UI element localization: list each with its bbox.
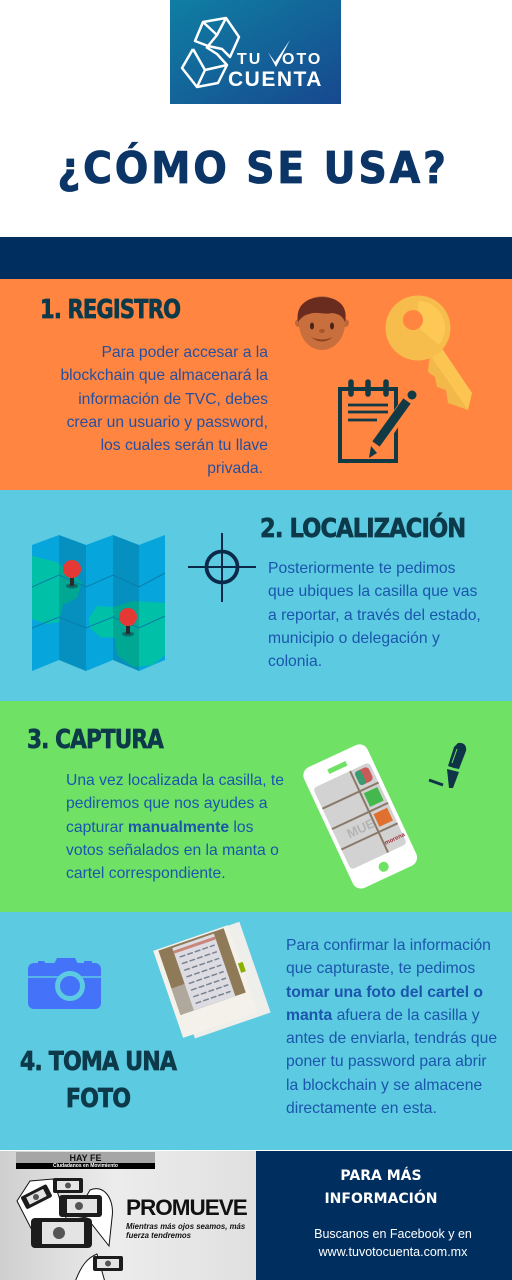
text: slogan: Mientras más ojos seamos, más fuerza tendremos: [126, 1222, 245, 1240]
text: toma una foto: directamente en esta.: [286, 1100, 437, 1117]
heading: para más información: PARA MÁS: [340, 1168, 422, 1184]
text: localización: [268, 560, 481, 670]
text: captura: capturar manualmente los: [66, 819, 253, 836]
panel: registro: [0, 279, 512, 490]
text: registro: los cuales serán tu llave: [101, 437, 268, 454]
text: toma una foto: que capturaste, te pedimos: [286, 960, 475, 977]
banner: hay fe: [16, 1152, 155, 1169]
text: contacto: www.tuvotocuenta.com.mx: [319, 1245, 467, 1259]
icon: phone: morena: [384, 832, 407, 847]
icon: photo: [153, 922, 271, 1038]
icon: map: [32, 535, 166, 671]
text: registro: crear un usuario y password,: [67, 414, 268, 431]
heading: localización: 2. LOCALIZACIÓN: [260, 514, 465, 544]
text: promueve: PROMUEVE: [126, 1195, 247, 1220]
icon: face: [295, 296, 349, 350]
text: registro: información de TVC, debes: [78, 391, 268, 408]
title: ¿CÓMO SE USA?: [57, 143, 449, 194]
icon: phone: [303, 744, 418, 888]
text: toma una foto: [286, 937, 497, 1117]
heading: registro: 1. REGISTRO: [40, 295, 180, 325]
text: localización: que ubiques la casilla que vas: [268, 583, 477, 600]
icon: phone: MUE: [344, 815, 377, 841]
logo: [170, 0, 341, 104]
text: localización: municipio o delegación y: [268, 630, 440, 647]
text: captura: Una vez localizada la casilla, te: [66, 772, 284, 789]
text: captura: cartel correspondiente.: [66, 865, 226, 882]
text: registro: Para poder accesar a la: [101, 344, 268, 361]
logo: OTO: [282, 51, 322, 68]
banner: hay fe: HAY FE: [69, 1153, 102, 1163]
text: localización: a reportar, a través del estado,: [268, 607, 481, 624]
text: toma una foto: tomar una foto del cartel o: [286, 984, 483, 1001]
text: localización: colonia.: [268, 653, 322, 670]
text: toma una foto: manta afuera de la casilla y: [286, 1007, 480, 1024]
illustration: hands with phones: [16, 1178, 123, 1280]
text: captura: pediremos que nos ayudes a: [66, 795, 267, 812]
heading: toma una foto: FOTO: [66, 1084, 130, 1114]
icon: key: [386, 296, 472, 410]
panel: más información: [256, 1151, 512, 1280]
panel: captura: [0, 701, 512, 912]
logo: TU: [237, 51, 262, 68]
heading: toma una foto: 4. TOMA UNA: [20, 1047, 176, 1077]
text: toma una foto: Para confirmar la información: [286, 937, 491, 954]
heading: para más información: INFORMACIÓN: [324, 1191, 438, 1207]
text: registro: privada.: [207, 460, 263, 477]
text: localización: Posteriormente te pedimos: [268, 560, 455, 577]
text: captura: [66, 772, 284, 882]
icon: pen: [428, 742, 466, 788]
navy band: [0, 237, 512, 279]
text: registro: [60, 344, 268, 477]
text: toma una foto: antes de enviarla, tendrás que: [286, 1030, 497, 1047]
heading: para más información: [324, 1166, 438, 1207]
heading: toma una foto: [20, 1047, 178, 1114]
text: contacto: Buscanos en Facebook y en: [314, 1227, 472, 1241]
panel: promueve: [0, 1151, 256, 1280]
icon: camera: [28, 958, 101, 1009]
text: toma una foto: la blockchain y se almacene: [286, 1077, 482, 1094]
text: toma una foto: poner tu password para abrir: [286, 1053, 487, 1070]
logo: CUENTA: [228, 68, 323, 91]
text: registro: blockchain que almacenará la: [60, 367, 268, 384]
text: captura: votos señalados en la manta o: [66, 842, 279, 859]
panel: toma una foto: [0, 912, 512, 1150]
panel: localización: [0, 490, 512, 701]
text: contacto: [314, 1227, 472, 1259]
icon: notepad: [338, 379, 416, 463]
heading: captura: 3. CAPTURA: [27, 725, 163, 755]
icon: crosshair: [188, 533, 256, 602]
banner: hay fe: Ciudadanos en Movimiento: [53, 1163, 118, 1169]
